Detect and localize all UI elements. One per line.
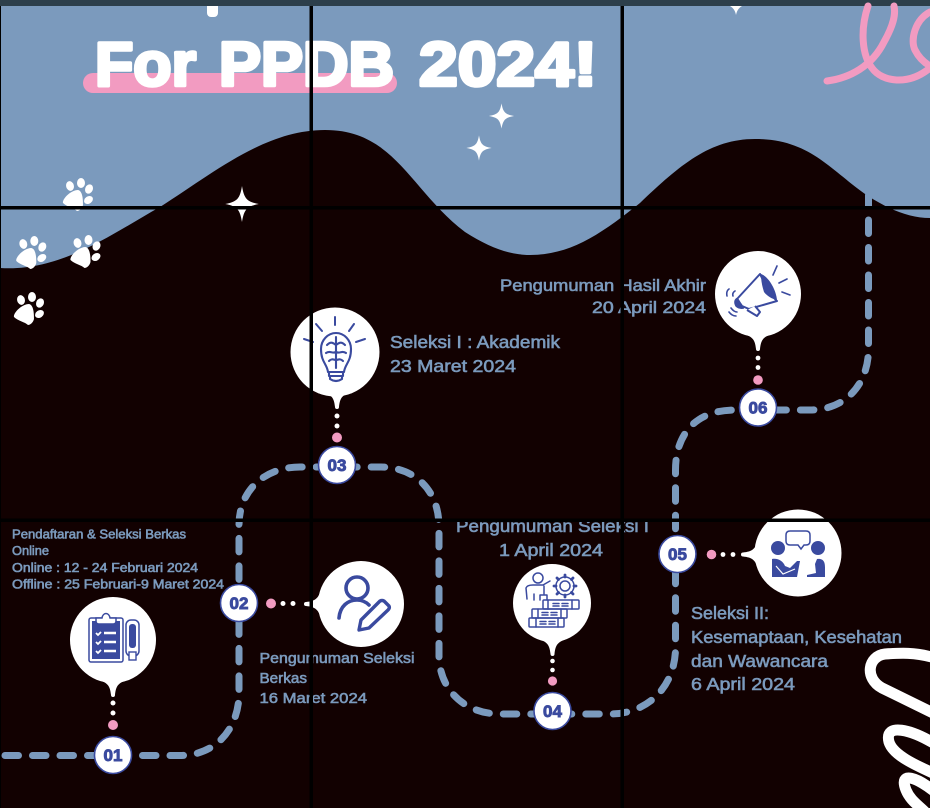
text: step 01: Pendaftaran & Seleksi Berkas — [12, 528, 186, 542]
text: step 05 — [691, 603, 902, 694]
number 02: 02 — [230, 594, 248, 613]
bubble 03 — [290, 308, 380, 396]
top edge bar — [0, 0, 930, 6]
bubble 05 tip — [741, 540, 758, 568]
text: step 05: Seleksi II: — [691, 603, 769, 623]
text: step 02 — [260, 650, 414, 707]
icon: person with pencil — [339, 577, 389, 630]
bubble 03 tip — [323, 392, 351, 409]
title — [83, 30, 597, 100]
step 06 — [715, 251, 801, 426]
text: step 05: 6 April 2024 — [691, 674, 795, 694]
bubble 06 — [715, 251, 801, 337]
number badge 04 — [534, 692, 571, 730]
pink dot 03 — [332, 432, 342, 442]
number 06: 06 — [749, 398, 767, 418]
number 01: 01 — [104, 746, 122, 765]
connector dots 03 — [334, 414, 340, 428]
text: step 01: Online — [12, 544, 49, 558]
step 03 — [290, 308, 380, 484]
number 03: 03 — [328, 456, 346, 475]
text: step 05: Kesemaptaan, Kesehatan — [691, 627, 902, 647]
number badge 02 — [220, 584, 258, 622]
step 05 — [659, 510, 842, 596]
step 01 — [70, 597, 156, 774]
decoration: white squiggle — [870, 653, 930, 808]
number 04: 04 — [543, 702, 562, 721]
text: step 02: 16 Maret 2024 — [260, 690, 367, 707]
icon: person climbing books with gear — [526, 573, 579, 627]
text: step 06 — [500, 277, 707, 317]
star: large on hill — [225, 186, 259, 222]
text: step 02: Pengumuman Seleksi — [260, 650, 414, 667]
connector dots 06 — [756, 356, 760, 370]
bubble 01 — [70, 597, 156, 683]
connector dots 02 — [280, 601, 296, 606]
text: step 06: 20 April 2024 — [592, 299, 706, 317]
paw print 3 — [70, 235, 102, 268]
pink dot 04 — [548, 676, 557, 686]
step 04 — [513, 564, 591, 730]
text: step 05: dan Wawancara — [691, 651, 828, 671]
bubble 05 — [754, 510, 842, 596]
bubble 04 — [513, 564, 591, 642]
number 05: 05 — [668, 545, 687, 564]
text: step 01: Offline : 25 Februari-9 Maret 2024 — [12, 578, 224, 592]
icon: megaphone — [727, 266, 790, 316]
connector dots 04 — [550, 659, 555, 672]
icon: clipboard and pen — [89, 614, 139, 662]
number badge 03 — [318, 446, 356, 484]
paw print 1 — [63, 178, 94, 211]
pink dot 05 — [707, 550, 716, 559]
connector dots 05 — [721, 552, 735, 557]
title word: 2024!: 2024! — [419, 30, 597, 100]
number badge 06 — [740, 389, 776, 426]
text: step 03: 23 Maret 2024 — [390, 356, 516, 376]
dashed timeline path — [5, 195, 868, 756]
number badge 01 — [94, 736, 132, 774]
text: step 04: Pengumuman Seleksi I — [456, 516, 649, 536]
step 02 — [220, 561, 404, 647]
star: title lower — [466, 135, 492, 161]
bubble 01 tip — [99, 680, 127, 697]
decoration: top fragments — [207, 6, 742, 17]
title word: For: For — [95, 30, 196, 100]
paw print 4 — [14, 292, 45, 325]
pink dot 02 — [266, 598, 276, 608]
text: step 03 — [390, 332, 560, 376]
text: step 04: 1 April 2024 — [499, 540, 603, 560]
text: step 02: Berkas — [260, 670, 307, 687]
text: step 06: Pengumuman Hasil Akhir — [500, 277, 707, 295]
text: step 01 — [12, 528, 224, 592]
text: step 03: Seleksi I : Akademik — [390, 332, 560, 352]
bubble 04 tip — [538, 639, 566, 656]
connector dots 01 — [110, 700, 116, 716]
text: step 04 — [456, 516, 649, 560]
icon: two people talking — [771, 531, 825, 577]
title word: PPDB: PPDB — [219, 30, 394, 100]
paw print 2 — [16, 236, 48, 269]
text: step 01: Online : 12 - 24 Februari 2024 — [12, 561, 198, 575]
bubble 02 tip — [304, 590, 321, 618]
star: title right — [489, 103, 514, 129]
decoration: pink loops — [827, 6, 930, 81]
bubble 06 tip — [744, 334, 772, 351]
bubble 02 — [318, 561, 404, 647]
number badge 05 — [659, 536, 696, 572]
icon: brain light bulb — [304, 317, 365, 381]
pink dot 06 — [753, 375, 763, 385]
title highlight — [83, 73, 397, 93]
pink dot 01 — [108, 720, 118, 730]
